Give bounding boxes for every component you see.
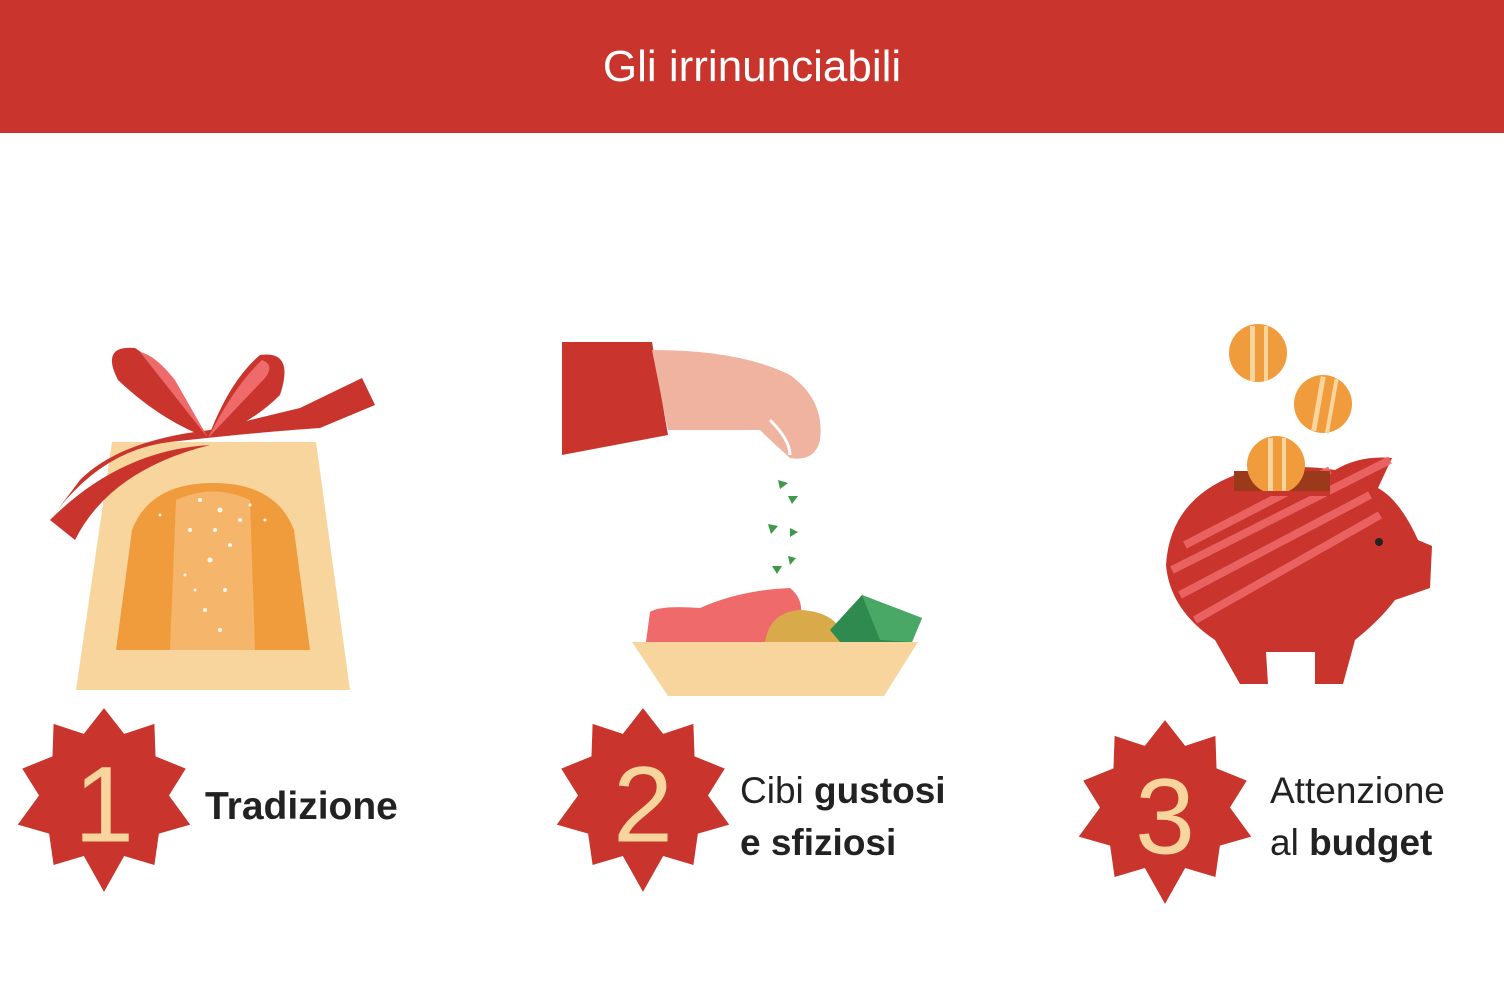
icon: piggy bank with coins [1166, 324, 1432, 684]
label 2: e sfiziosi [740, 822, 896, 863]
badge 1 [18, 708, 190, 892]
title: Gli irrinunciabili [603, 42, 901, 91]
icon: panettone gift [50, 348, 375, 690]
label 3: al budget [1270, 822, 1432, 863]
label 2: Cibi gustosi [740, 770, 946, 811]
badge 2: 2 [613, 744, 673, 864]
badge 3 [1079, 720, 1251, 904]
label 3 [1270, 770, 1445, 863]
header [0, 0, 1504, 133]
label 1: Tradizione [205, 785, 398, 828]
badge 2 [557, 708, 729, 892]
badge 1: 1 [74, 744, 134, 864]
label 2 [740, 770, 946, 863]
badge 3: 3 [1135, 756, 1195, 876]
label 3: Attenzione [1270, 770, 1445, 811]
icon: hand sprinkling on plate [562, 342, 922, 696]
